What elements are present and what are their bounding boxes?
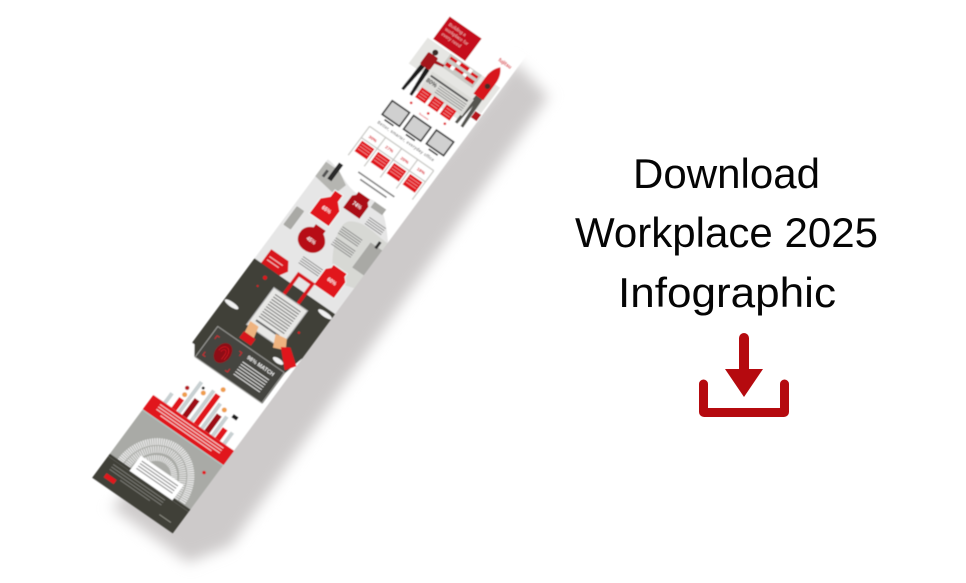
title box (433, 16, 482, 61)
panel: hero (387, 14, 519, 144)
rocket building (473, 64, 505, 100)
grey curved lobe (312, 215, 389, 293)
sheet background (92, 0, 527, 533)
grey bars (163, 371, 248, 445)
grey machine (352, 238, 386, 275)
grey box (371, 202, 386, 215)
jar 60%: 60% (325, 277, 338, 288)
hero copy: 80% (424, 78, 438, 90)
red cards (354, 141, 423, 193)
panel: red band (143, 395, 234, 465)
icon: download arrow (699, 333, 789, 417)
panel: dark tablet section (186, 249, 342, 406)
left hand and sleeve (238, 321, 263, 346)
scan brackets (203, 336, 242, 372)
logo: fujitsu (497, 57, 512, 71)
shelves (441, 54, 482, 88)
percentages: 20% (399, 156, 410, 165)
tag (260, 249, 293, 280)
monitor 2 (402, 115, 431, 144)
light grey background (255, 159, 408, 314)
monitor 1 (380, 101, 410, 129)
tilted infographic sheet (92, 0, 527, 533)
heading: download text: Infographic (618, 269, 836, 316)
red caption: Success (418, 112, 430, 121)
percentages: 27% (384, 145, 395, 154)
heading: download text: Workplace 2025 (575, 209, 878, 256)
red button (104, 473, 117, 484)
fingerprint card (195, 326, 284, 403)
dark background (186, 258, 335, 406)
heading: download text: Download (633, 150, 820, 197)
panel: bottles (253, 156, 411, 316)
arrow (725, 333, 763, 397)
stat squares (415, 87, 457, 121)
title box: workplace for (444, 27, 470, 46)
red dot (202, 470, 207, 475)
bag handle (283, 274, 313, 306)
bottle 74% (343, 190, 373, 219)
drop shadow of tilted infographic (111, 28, 564, 576)
panel: footer (92, 454, 191, 533)
heading: download text (575, 150, 878, 316)
connector dots (409, 99, 447, 127)
percentages (367, 133, 426, 176)
percentages: 19% (416, 166, 426, 176)
white card (130, 456, 184, 500)
jar 60% (313, 262, 351, 299)
red dots (247, 275, 317, 334)
bottle 65% (309, 186, 349, 227)
man (401, 47, 449, 101)
tray (699, 380, 789, 417)
title box: every need (440, 32, 462, 49)
table frame (348, 126, 434, 200)
panel: monitors (380, 100, 454, 159)
grey bottle (283, 206, 304, 230)
bottle 65%: 65% (320, 205, 332, 216)
title box: Building a (448, 22, 467, 38)
bright red bars (171, 378, 242, 441)
dark red bars (182, 398, 222, 434)
panel: bar chart (163, 364, 253, 445)
fingerprint (210, 340, 236, 366)
right hand and sleeve (261, 332, 307, 374)
section heading (355, 172, 394, 201)
jar 45%: 45% (305, 236, 317, 247)
bottle 74%: 74% (351, 201, 363, 212)
jar 45% (293, 220, 332, 258)
hands (181, 370, 237, 421)
match text: 98% MATCH (245, 355, 275, 378)
section heading: Better, smarter, everyday office (376, 120, 436, 163)
woman (455, 81, 499, 132)
percentages: 30% (367, 134, 378, 143)
machine top left (313, 156, 355, 197)
panel: grey tree section (108, 409, 223, 512)
panel: percentage table (348, 126, 434, 200)
card copy (358, 144, 420, 189)
tree (121, 426, 207, 503)
tablet (247, 287, 308, 348)
monitor 3 (425, 130, 454, 158)
details (234, 362, 269, 392)
icons (184, 378, 242, 423)
hero backdrop (398, 38, 500, 128)
clouds (212, 262, 333, 373)
copy blocks (299, 200, 386, 291)
